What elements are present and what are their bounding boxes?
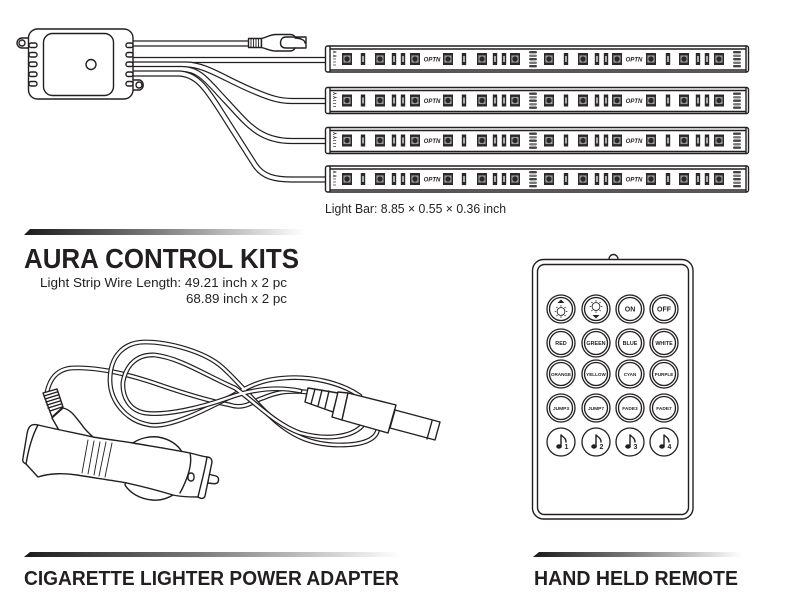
mounting ear left (17, 38, 30, 48)
mounting ear right (130, 80, 143, 90)
title: cigarette lighter power adapter: CIGARETTE LIGHTER POWER ADAPTER (24, 568, 400, 590)
wire length note: Light Strip Wire Length: 49.21 inch x 2 pc (40, 276, 287, 290)
DC plug connector (248, 34, 306, 51)
remote body (532, 254, 693, 519)
button row 2 (547, 329, 678, 357)
remote control (532, 254, 693, 519)
light bar 2 (326, 88, 748, 114)
lighter body (23, 425, 212, 498)
light bar 1: OPTN (424, 58, 441, 64)
light bar 4: OPTN (626, 178, 643, 184)
title: hand held remote: HAND HELD REMOTE (534, 568, 738, 590)
light bar 4 (326, 166, 748, 192)
button row 4: JUMP7 (588, 406, 604, 412)
wire length note (40, 276, 287, 306)
button row 4: FADE7 (656, 406, 672, 412)
button row 4: JUMP3 (553, 406, 569, 412)
button row 4 (547, 394, 678, 422)
DC barrel plug (305, 388, 440, 440)
light bar 2: OPTN (626, 99, 643, 105)
light bar 2: OPTN (424, 99, 441, 105)
lighter tip (208, 474, 219, 484)
button row 1: OFF (657, 306, 672, 314)
lighter grip ribs (82, 440, 112, 477)
button row 3: ORANGE (551, 372, 571, 377)
button row 5: music: 4 (668, 444, 672, 451)
heading rule: kits (24, 229, 305, 235)
light bar 4: OPTN (424, 178, 441, 184)
control box (17, 29, 143, 99)
button row 2: RED (555, 341, 567, 347)
wiring harness (133, 44, 326, 180)
button row 4: FADE3 (622, 406, 638, 412)
lighter clips (125, 437, 182, 500)
button row 5: music (547, 428, 678, 456)
button row 5: music: 2 (600, 444, 604, 451)
button row 3: YELLOW (586, 372, 606, 377)
light bar dimensions: Light Bar: 8.85 × 0.55 × 0.36 inch (325, 202, 506, 216)
light bar 3: OPTN (626, 139, 643, 145)
button row 3 (547, 360, 678, 388)
button row 2: GREEN (586, 341, 606, 347)
button row 3: CYAN (624, 372, 637, 377)
button row 5: music: 3 (634, 444, 638, 451)
power adapter illustration (23, 342, 440, 500)
strain relief (52, 408, 93, 437)
button row 5: music: 1 (565, 444, 569, 451)
lighter slot (188, 473, 194, 481)
light bar 1 (326, 46, 748, 72)
button row 2: BLUE (623, 341, 638, 347)
light bar 1: OPTN (626, 58, 643, 64)
adapter cable (47, 342, 378, 445)
title: Aura Control Kits: AURA CONTROL KITS (24, 243, 299, 274)
button row 3: PURPLE (655, 372, 673, 377)
light bar 3: OPTN (424, 139, 441, 145)
light bar 3 (326, 128, 748, 154)
button row 1: ON (625, 306, 635, 314)
heading rule: adapter (24, 552, 400, 557)
button row 1 (547, 295, 678, 323)
heading rule: remote (533, 552, 742, 557)
button row 2: WHITE (655, 341, 673, 347)
wire length note: 68.89 inch x 2 pc (186, 292, 287, 306)
